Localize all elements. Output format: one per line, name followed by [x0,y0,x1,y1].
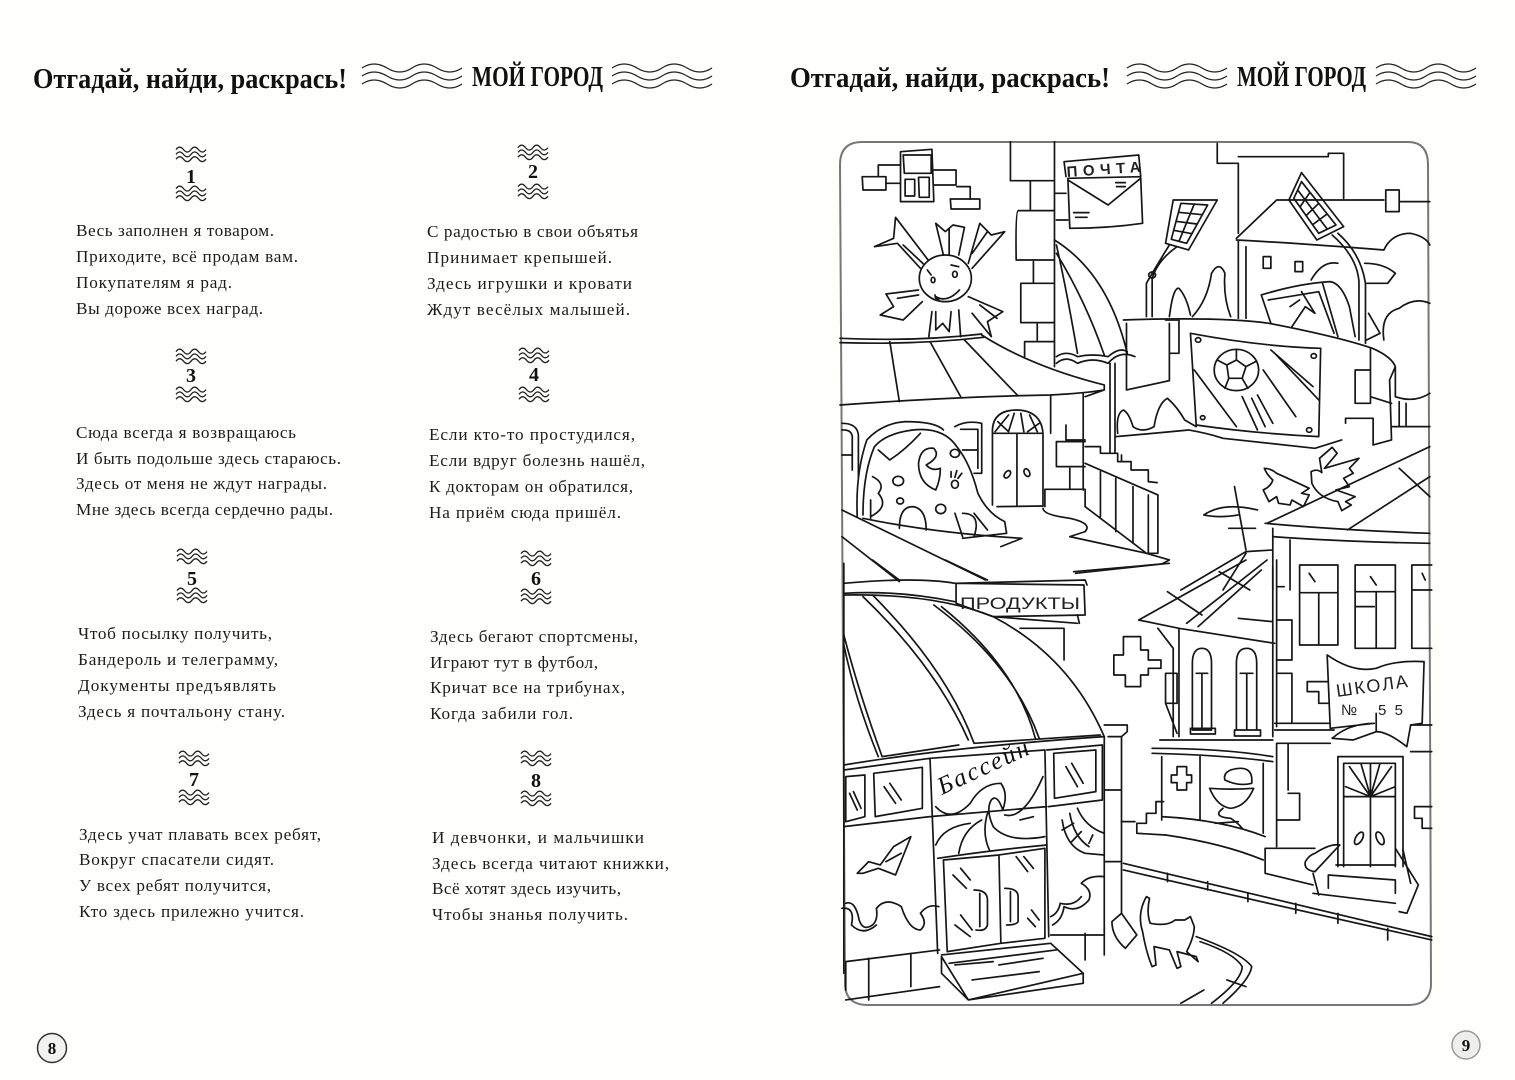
wave ornament [1376,64,1476,88]
riddle 2 [427,145,638,319]
riddle 2: Здесь игрушки и кровати [427,274,632,293]
riddle 6: Играют тут в футбол, [430,653,598,672]
curb and road [1123,863,1432,1003]
riddle 7: Здесь учат плавать всех ребят, [79,825,321,844]
riddle 4: Если кто-то простудился, [429,425,635,444]
antenna [1204,487,1257,550]
house and trees behind [1169,143,1430,340]
page number 9: 9 [1462,1036,1470,1055]
title right: Отгадай, найди, раскрась! [790,62,1110,94]
wall with laundry [1123,319,1430,445]
riddle 2: Принимает крепышей. [427,248,612,267]
riddle 5: Бандероль и телеграмму, [78,650,278,669]
riddle 3: Сюда всегда я возвращаюсь [76,423,296,442]
upper awning [840,334,1104,405]
header right [790,60,1476,94]
wave ornament [612,64,712,88]
pool facade [842,745,1104,953]
wave ornament [362,64,462,88]
school roof [1181,447,1430,590]
sun emblem [874,217,1005,337]
big wave [936,777,1045,853]
riddle 6: Когда забили гол. [430,704,573,723]
riddle 5: Чтоб посылку получить, [78,624,272,643]
city illustration [840,142,1432,1003]
big awning [844,595,1104,765]
upper part of city [840,142,1430,590]
page number 8 [38,1034,66,1062]
page number 9 [1452,1031,1480,1059]
sign text: post: ПОЧТА [1066,159,1141,181]
riddle 1: Весь заполнен я товаром. [76,221,274,240]
riddle 2: С радостью в свои объятья [427,222,638,241]
riddle 3 [76,349,341,519]
roof base with shop sign [844,560,1169,660]
building with arch door [842,393,1085,507]
pool steps and base [846,928,1104,1000]
stairs and rail [1085,447,1158,553]
riddle 1 [76,147,298,318]
page number 8: 8 [48,1039,56,1058]
riddle 6: Кричат все на трибунах, [430,678,625,697]
riddle 2: 2 [528,161,538,183]
football banner [1190,333,1321,437]
riddle 4: На приём сюда пришёл. [429,503,621,522]
sign text: groceries: ПРОДУКТЫ [960,594,1080,613]
riddle 8: Здесь всегда читают книжки, [432,854,669,873]
riddle 7: Кто здесь прилежно учится. [79,902,304,921]
riddle 8: 8 [531,770,541,792]
ground behind [1116,398,1342,448]
riddle 6 [430,551,638,723]
picture frame [840,142,1431,1005]
sign text: school: ШКОЛА [1335,671,1409,701]
spotted arch blob [857,422,1007,538]
riddle 7 [79,751,321,921]
header left [33,60,712,95]
riddle 4: К докторам он обратился, [429,477,633,496]
riddle 6: Здесь бегают спортсмены, [430,627,638,646]
riddle 1: Покупателям я рад. [76,273,232,292]
envelope sign [1054,155,1143,228]
umbrella [1054,240,1135,453]
riddle 8: И девчонки, и мальчишки [432,828,644,847]
riddle 3: 3 [186,365,196,387]
riddle 3: Здесь от меня не ждут награды. [76,474,327,493]
riddle 3: И быть подольше здесь стараюсь. [76,449,341,468]
street lamps [1146,173,1365,343]
sign text: school number: № 55 [1341,702,1403,719]
riddle 7: У всех ребят получится, [79,876,271,895]
riddle 6: 6 [531,568,541,590]
riddle 5 [78,549,285,721]
riddle 8: Чтобы знанья получить. [432,905,628,924]
riddle 5: 5 [187,568,197,590]
sign text: swimming pool: Бассейн [932,735,1033,801]
birds [1263,447,1359,511]
lower part of city [842,560,1432,1003]
pool doors [938,845,1047,952]
riddle 4: Если вдруг болезнь нашёл, [429,451,645,470]
riddle 5: Здесь я почтальону стану. [78,702,285,721]
window with pipes [862,149,980,209]
riddle 8: Всё хотят здесь изучить, [432,879,621,898]
riddle 1: 1 [186,166,196,188]
cat [1140,897,1198,968]
lower roof and sidewalk [842,508,1169,582]
riddle 5: Документы предъявлять [78,676,276,695]
riddle 3: Мне здесь всегда сердечно рады. [76,500,333,519]
riddle 1: Вы дороже всех наград. [76,299,263,318]
riddle 4 [429,348,645,522]
section name left: МОЙ ГОРОД [472,60,603,93]
wave ornament [1127,64,1227,88]
riddle 1: Приходите, всё продам вам. [76,247,298,266]
school building [1265,560,1432,913]
title left: Отгадай, найди, раскрась! [33,63,347,95]
riddle 4: 4 [529,364,539,386]
drainpipe [1104,725,1137,948]
section name right: МОЙ ГОРОД [1237,60,1366,93]
left edge [843,563,845,973]
riddle 8 [432,751,669,924]
riddle 7: Вокруг спасатели сидят. [79,850,274,869]
riddle 2: Ждут весёлых малышей. [427,300,630,319]
stone wall [1010,142,1054,367]
riddle 7: 7 [189,769,199,791]
pharmacy building [1114,560,1275,860]
